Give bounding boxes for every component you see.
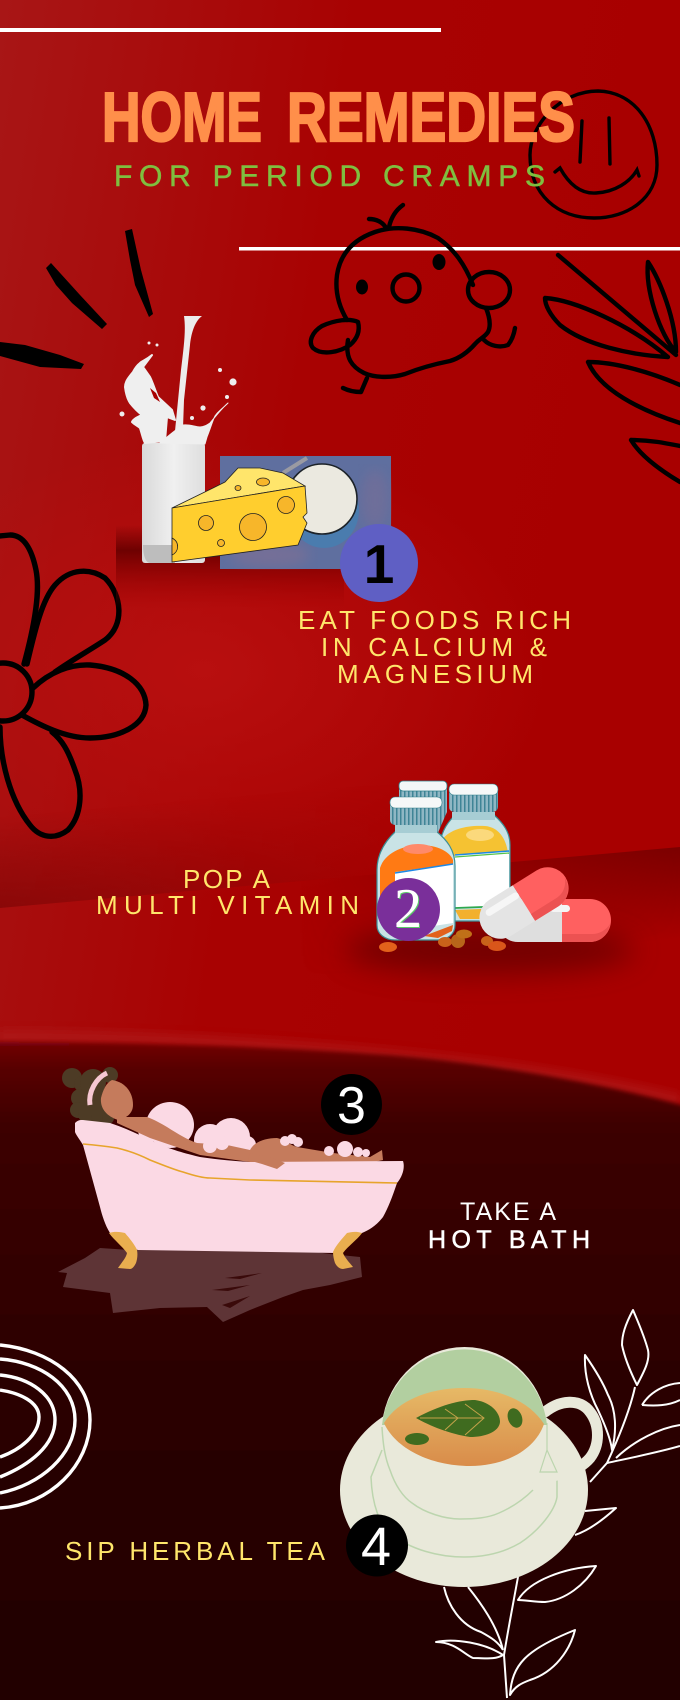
handle base (540, 1423, 557, 1472)
right bottle (440, 784, 510, 921)
body (117, 1117, 383, 1163)
cup handle (535, 1402, 598, 1476)
illustration: brush shadow under tub (58, 1248, 362, 1322)
illustration: cheese wedge (172, 468, 307, 562)
text: remedy 2: POP A (183, 864, 271, 894)
number badge 3 (321, 1074, 382, 1135)
hair (62, 1067, 118, 1125)
saucer ring (371, 1450, 557, 1557)
doodle: white concentric arcs (0, 1345, 90, 1508)
tub (75, 1120, 404, 1253)
text: remedy 1: IN CALCIUM & (321, 632, 547, 662)
illustration: white plant sprig (436, 1310, 680, 1698)
text: remedy 3 (428, 1198, 590, 1254)
number badge 2: 2 (394, 878, 422, 940)
doodle: chick (311, 205, 515, 392)
text: remedy 1 (298, 605, 571, 689)
number badge 4: 4 (361, 1517, 391, 1577)
front bottle (377, 797, 455, 940)
title: HOME (102, 78, 262, 156)
foam on body (203, 1134, 370, 1157)
headband (90, 1073, 107, 1105)
cup rim (382, 1349, 547, 1425)
title (102, 78, 575, 156)
subtitle: FOR PERIOD CRAMPS (114, 160, 545, 193)
big leaf (416, 1400, 500, 1437)
illustration: woman in bathtub (62, 1067, 404, 1269)
text: remedy 2 (96, 864, 359, 920)
number badge 2 (377, 878, 440, 941)
shadow: food group (116, 525, 344, 610)
text: remedy 1: MAGNESIUM (337, 659, 533, 689)
text: remedy 3: HOT BATH (428, 1226, 590, 1254)
shadow: vitamins (345, 926, 635, 974)
spilled tablets (379, 930, 506, 952)
tea surface (384, 1388, 544, 1466)
doodle: brush rays (0, 229, 153, 369)
small leaf right (505, 1406, 525, 1430)
illustration: vitamin bottles (377, 781, 510, 952)
number badge 4 (346, 1514, 408, 1577)
cup body outline (382, 1427, 533, 1519)
top white rule (0, 28, 441, 32)
foam back (138, 1102, 256, 1156)
illustration: yogurt photo (220, 456, 391, 569)
forearm over rim (248, 1153, 285, 1169)
text: remedy 3: TAKE A (460, 1198, 556, 1226)
number badge 3: 3 (337, 1077, 366, 1135)
number badge 2: 2 (395, 879, 423, 941)
text: remedy 2: MULTI VITAMIN (96, 890, 359, 920)
cup body (382, 1347, 548, 1519)
background: dark lower wave (0, 1042, 680, 1700)
head (101, 1080, 133, 1120)
number badge 1: 1 (364, 533, 394, 595)
saucer (340, 1393, 588, 1587)
small leaf left (405, 1433, 429, 1445)
doodle: leaf branch right (545, 255, 680, 482)
text: remedy 4: SIP HERBAL TEA (65, 1536, 326, 1566)
background: red upper area (0, 0, 680, 1120)
second white rule (239, 247, 680, 250)
illustration: cup of herbal tea (340, 1347, 598, 1587)
tub feet (109, 1232, 362, 1269)
text: remedy 1: EAT FOODS RICH (298, 605, 571, 635)
background: light band above wave (0, 1036, 680, 1100)
illustration: glass of milk with splash (120, 316, 237, 563)
doodle: flower (0, 535, 146, 836)
number badge 1 (340, 524, 418, 602)
tub gold line (83, 1144, 397, 1183)
doodle: smiley (530, 91, 657, 218)
illustration: capsules (471, 859, 611, 947)
title: REMEDIES (287, 78, 575, 156)
